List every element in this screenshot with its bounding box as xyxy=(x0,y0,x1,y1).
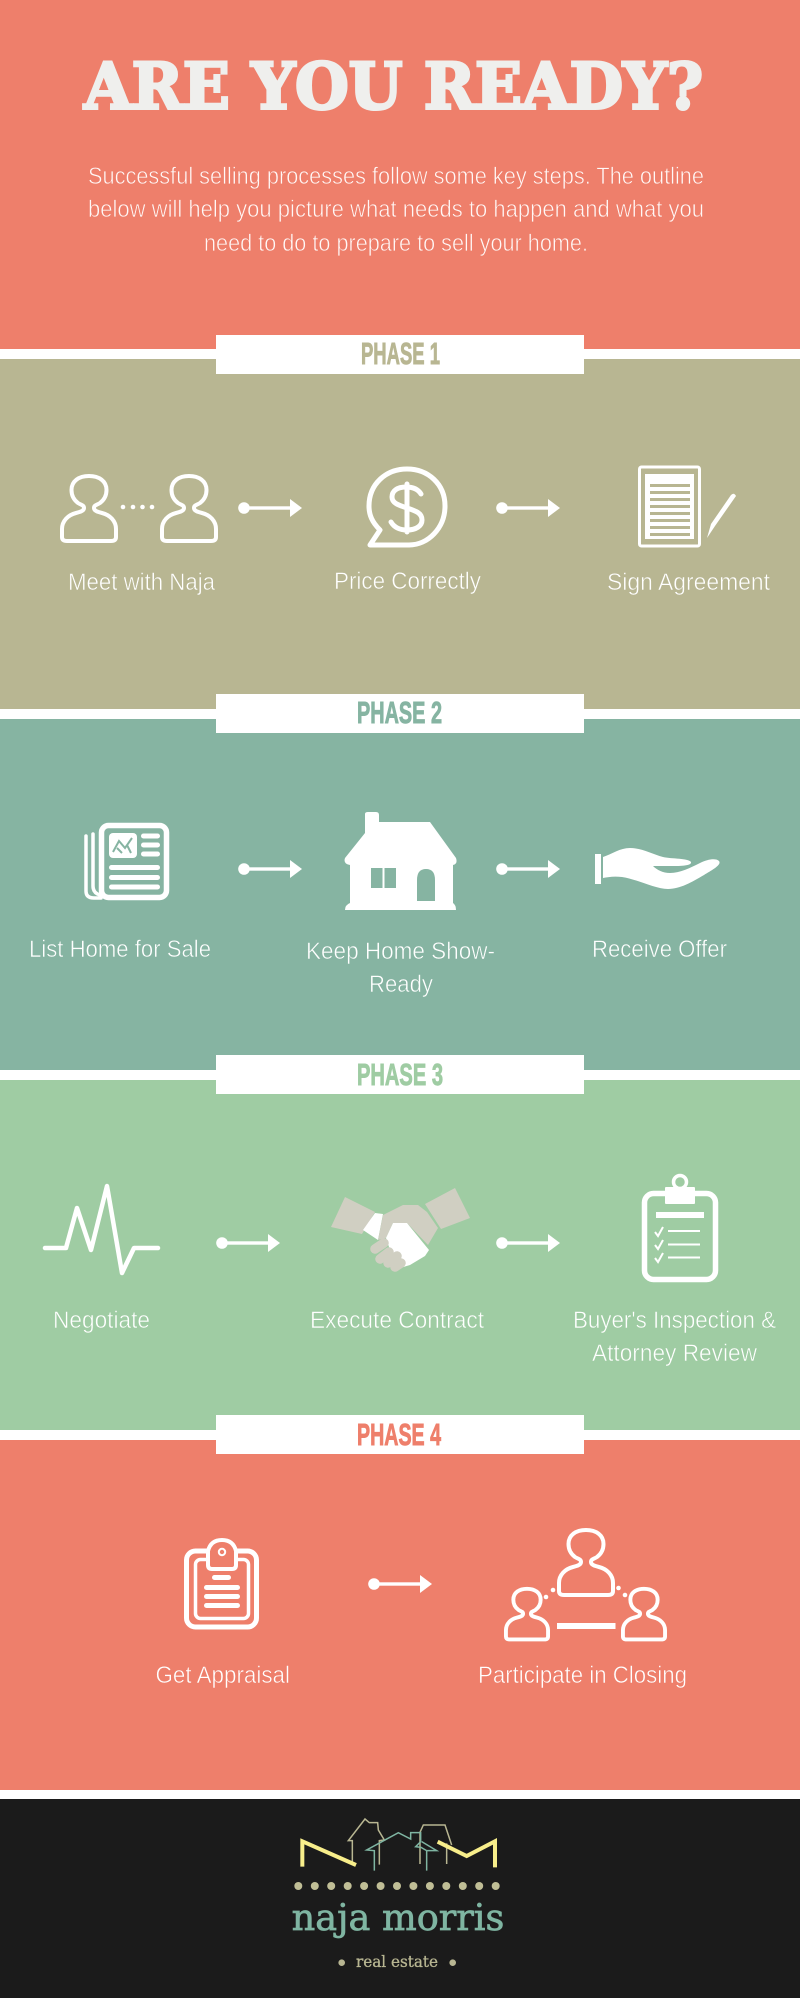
label: receive offer: Receive Offer xyxy=(592,936,727,963)
label: meet with naja: Meet with Naja xyxy=(68,569,216,596)
icon: negotiation pulse xyxy=(45,1186,158,1273)
intro text: need to do to prepare to sell your home. xyxy=(204,230,588,257)
phase 3 banner xyxy=(0,1055,800,1094)
phase 4 banner xyxy=(0,1415,800,1454)
title: ARE YOU READY? xyxy=(83,50,703,124)
icon: closing group xyxy=(506,1530,665,1639)
label: keep home show-ready xyxy=(306,938,495,998)
arrow xyxy=(238,499,302,517)
label: execute contract: Execute Contract xyxy=(310,1307,484,1334)
label: sign agreement: Sign Agreement xyxy=(607,569,770,596)
phase 1 banner xyxy=(0,335,800,374)
arrow xyxy=(368,1575,432,1593)
panel: phase 1 xyxy=(0,359,800,709)
icon: open hand xyxy=(595,848,720,889)
phase 2 banner xyxy=(0,694,800,733)
arrow xyxy=(238,860,302,878)
footer panel xyxy=(0,1799,800,1998)
phase 4 banner: PHASE 4 xyxy=(357,1417,441,1452)
icon: two people meeting xyxy=(62,476,216,541)
panel: header xyxy=(0,0,800,349)
logo: house outlines xyxy=(302,1819,495,1871)
panel: phase 4 xyxy=(0,1440,800,1790)
label: keep home show-ready: Ready xyxy=(369,971,433,998)
logo: wordmark: naja morris xyxy=(292,1898,504,1939)
panel: phase 2 xyxy=(0,719,800,1070)
label: list home for sale: List Home for Sale xyxy=(29,936,211,963)
label: price correctly: Price Correctly xyxy=(334,568,481,595)
label: inspection and review: Buyer's Inspection & xyxy=(573,1307,776,1334)
logo: tagline: real estate xyxy=(356,1952,438,1971)
phase 1 banner: PHASE 1 xyxy=(361,336,440,371)
icon: agreement and pen xyxy=(640,467,736,546)
phase 3 banner: PHASE 3 xyxy=(357,1057,443,1092)
label: inspection and review: Attorney Review xyxy=(592,1340,758,1367)
icon: price bubble xyxy=(369,469,445,545)
arrow xyxy=(496,1234,560,1252)
intro text: Successful selling processes follow some key steps. The outline xyxy=(88,163,704,190)
phase 2 banner: PHASE 2 xyxy=(357,695,442,730)
arrow xyxy=(216,1234,280,1252)
intro text: below will help you picture what needs to happen and what you xyxy=(88,196,704,223)
icon: inspection checklist xyxy=(644,1176,716,1280)
arrow xyxy=(496,499,560,517)
label: participate in closing: Participate in Closing xyxy=(478,1662,687,1689)
label: negotiate: Negotiate xyxy=(53,1307,150,1334)
icon: newspaper xyxy=(86,826,166,898)
icon: house xyxy=(345,812,457,910)
label: get appraisal: Get Appraisal xyxy=(156,1662,290,1689)
arrow xyxy=(496,860,560,878)
intro text xyxy=(88,163,704,257)
panel: phase 3 xyxy=(0,1080,800,1430)
label: inspection and review xyxy=(573,1307,776,1367)
label: keep home show-ready: Keep Home Show- xyxy=(306,938,495,965)
icon: handshake xyxy=(331,1188,470,1268)
icon: appraisal clipboard xyxy=(186,1540,256,1627)
logo: dot row xyxy=(294,1882,500,1890)
